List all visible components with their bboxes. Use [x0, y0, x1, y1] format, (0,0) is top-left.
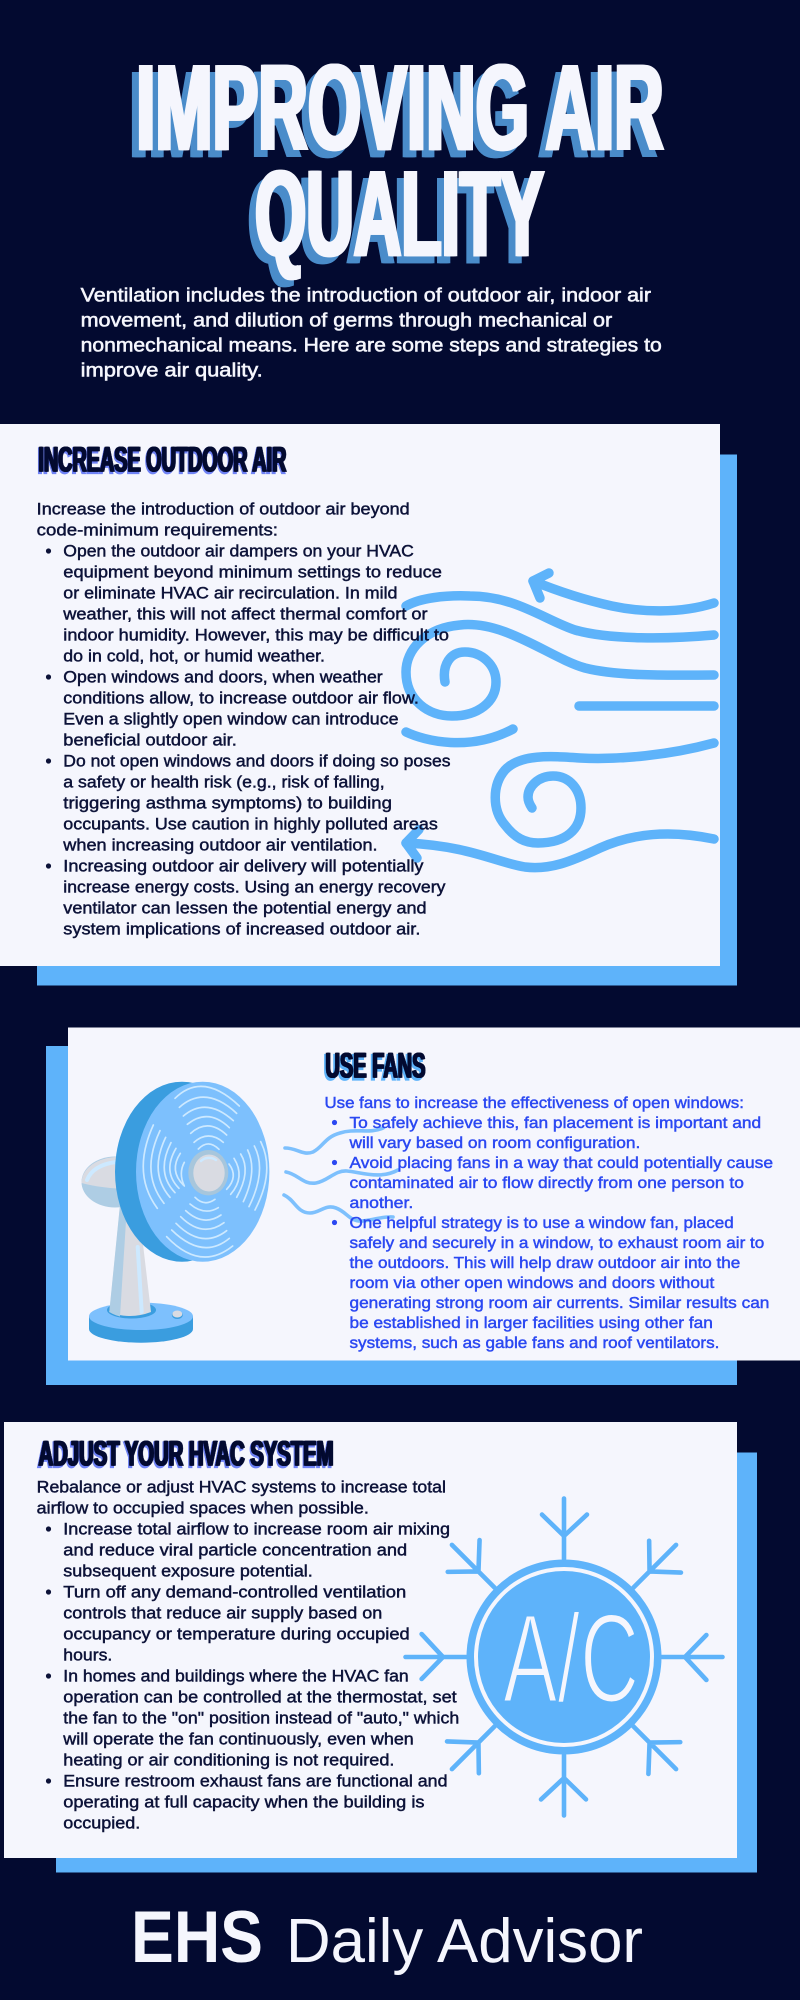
body text: outdoor air steps: do in cold, hot, or humid weather. — [63, 648, 325, 666]
body text: outdoor air steps: Increasing outdoor air delivery will potentially — [63, 858, 424, 876]
body text: fan guidance: safely and securely in a window, to exhaust room air to — [350, 1235, 764, 1252]
body text: outdoor air steps: Open the outdoor air dampers on your HVAC — [63, 542, 414, 560]
body text: fan guidance: Avoid placing fans in a way that could potentially cause — [350, 1155, 773, 1172]
body text: fan guidance: will vary based on room configuration. — [348, 1135, 640, 1152]
heading: increase outdoor air: INCREASE OUTDOOR AIR — [37, 441, 285, 481]
body text: hvac adjustments: controls that reduce air supply based on — [63, 1604, 382, 1622]
body text: outdoor air steps: Open windows and doors, when weather — [63, 668, 383, 686]
body text: fan guidance: contaminated air to flow directly from one person to — [350, 1175, 744, 1192]
panel shadow — [46, 1046, 737, 1385]
body text: hvac adjustments: Turn off any demand-controlled ventilation — [63, 1583, 406, 1601]
intro text: improve air quality. — [81, 361, 263, 382]
body text: fan guidance: the outdoors. This will help draw outdoor air into the — [350, 1255, 740, 1272]
heading: adjust your hvac system — [37, 1434, 334, 1475]
body text: outdoor air steps: Increase the introduction of outdoor air beyond — [37, 500, 410, 518]
body text: fan guidance: To safely achieve this, fan placement is important and — [350, 1115, 761, 1132]
heading: adjust your hvac system: ADJUST YOUR HVAC SYSTEM — [37, 1435, 332, 1475]
intro text — [81, 286, 662, 382]
title: QUALITY — [254, 145, 542, 281]
body text: fan guidance: room via other open windows and doors without — [350, 1275, 715, 1292]
body text: outdoor air steps: system implications of increased outdoor air. — [63, 920, 420, 938]
body text: fan guidance: generating strong room air currents. Similar results can — [350, 1295, 769, 1312]
body text: fan guidance: be established in larger facilities using other fan — [350, 1315, 713, 1332]
heading: adjust your hvac system: ADJUST YOUR HVAC SYSTEM — [39, 1434, 334, 1474]
footer logo: EHS Daily Advisor — [131, 1897, 643, 1978]
body text: hvac adjustments: hours. — [63, 1646, 112, 1664]
body text: outdoor air steps: ventilator can lessen the potential energy and — [63, 900, 427, 918]
heading: use fans: USE FANS — [326, 1046, 426, 1086]
body text: outdoor air steps: increase energy costs. Using an energy recovery — [63, 878, 446, 896]
body text: fan guidance: One helpful strategy is to use a window fan, placed — [350, 1215, 734, 1232]
body text: outdoor air steps: weather, this will not affect thermal comfort or — [62, 606, 428, 624]
body text: outdoor air steps: Even a slightly open window can introduce — [63, 710, 399, 728]
heading: adjust your hvac system: ADJUST YOUR HVAC SYSTEM — [39, 1434, 334, 1474]
body text: hvac adjustments: airflow to occupied spaces when possible. — [37, 1499, 369, 1517]
title — [128, 39, 665, 288]
icon: A/C snowflake — [406, 1498, 722, 1816]
heading: use fans — [324, 1046, 426, 1088]
body text: fan guidance: another. — [350, 1195, 413, 1212]
body text: hvac adjustments: operating at full capacity when the building is — [63, 1793, 425, 1811]
panel: use fans — [46, 1028, 800, 1385]
title: QUALITY — [246, 152, 536, 288]
icon: A/C snowflake: A/C — [503, 1588, 639, 1729]
intro text: Ventilation includes the introduction of outdoor air, indoor air — [81, 286, 652, 307]
heading: increase outdoor air: INCREASE OUTDOOR AIR — [39, 440, 287, 480]
body text: fan guidance: systems, such as gable fans and roof ventilators. — [350, 1335, 719, 1352]
intro text: movement, and dilution of germs through mechanical or — [81, 311, 613, 332]
heading: increase outdoor air — [37, 440, 287, 481]
body text: hvac adjustments: operation can be controlled at the thermostat, set — [63, 1688, 457, 1706]
footer logo: EHS Daily Advisor: Daily Advisor — [286, 1907, 643, 1976]
body text: fan guidance — [324, 1095, 773, 1352]
heading: use fans: USE FANS — [325, 1046, 425, 1086]
body text: hvac adjustments: the fan to the "on" position instead of "auto," which — [63, 1709, 459, 1727]
body text: outdoor air steps: a safety or health risk (e.g., risk of falling, — [63, 774, 385, 792]
panel shadow — [37, 454, 737, 986]
body text: fan guidance: Use fans to increase the effectiveness of open windows: — [324, 1095, 744, 1112]
body text: outdoor air steps: occupants. Use caution in highly polluted areas — [63, 816, 438, 834]
body text: hvac adjustments: In homes and buildings where the HVAC fan — [63, 1667, 409, 1685]
heading: use fans: USE FANS — [324, 1048, 424, 1088]
panel: adjust your hvac system — [4, 1422, 757, 1872]
icon: wind swirls — [406, 573, 714, 868]
icon: desk fan — [82, 1082, 269, 1343]
body text: outdoor air steps: triggering asthma symptoms) to building — [63, 794, 392, 812]
body text: hvac adjustments: Increase total airflow to increase room air mixing — [63, 1520, 450, 1538]
body text: hvac adjustments: occupied. — [63, 1814, 140, 1832]
body text: hvac adjustments: and reduce viral particle concentration and — [63, 1541, 407, 1559]
body text: outdoor air steps: code-minimum requirements: — [37, 522, 278, 540]
heading: use fans: USE FANS — [326, 1046, 426, 1086]
body text: hvac adjustments: occupancy or temperature during occupied — [63, 1625, 410, 1643]
body text: outdoor air steps: or eliminate HVAC air recirculation. In mild — [63, 584, 398, 602]
panel shadow — [56, 1452, 757, 1872]
intro text: nonmechanical means. Here are some steps and strategies to — [81, 336, 662, 357]
panel background — [4, 1422, 737, 1858]
title: QUALITY — [256, 145, 546, 281]
heading: increase outdoor air: INCREASE OUTDOOR AIR — [38, 440, 286, 480]
footer logo: EHS Daily Advisor: EHS — [131, 1897, 263, 1978]
panel: increase outdoor air — [0, 424, 737, 986]
title: QUALITY — [250, 152, 538, 288]
title: QUALITY — [255, 145, 544, 281]
body text: hvac adjustments: will operate the fan continuously, even when — [62, 1730, 414, 1748]
body text: outdoor air steps: when increasing outdoor air ventilation. — [62, 836, 378, 854]
heading: increase outdoor air: INCREASE OUTDOOR AIR — [38, 440, 286, 480]
body text: hvac adjustments: Ensure restroom exhaust fans are functional and — [63, 1772, 448, 1790]
title: QUALITY — [248, 152, 537, 288]
body text: outdoor air steps: indoor humidity. However, this may be difficult to — [63, 626, 449, 644]
body text: hvac adjustments: Rebalance or adjust HVAC systems to increase total — [37, 1478, 446, 1496]
body text: hvac adjustments: subsequent exposure potential. — [63, 1562, 313, 1580]
panel background — [0, 424, 720, 966]
body text: hvac adjustments: heating or air conditioning is not required. — [63, 1751, 394, 1769]
icon: air currents from fan — [284, 1128, 398, 1221]
heading: adjust your hvac system: ADJUST YOUR HVAC SYSTEM — [38, 1434, 333, 1474]
body text: outdoor air steps — [37, 500, 450, 938]
panel background — [68, 1028, 800, 1360]
body text: hvac adjustments — [37, 1478, 459, 1832]
body text: outdoor air steps: beneficial outdoor air. — [63, 732, 237, 750]
body text: outdoor air steps: Do not open windows and doors if doing so poses — [63, 752, 451, 770]
body text: outdoor air steps: equipment beyond minimum settings to reduce — [63, 564, 442, 582]
body text: outdoor air steps: conditions allow, to increase outdoor air flow. — [63, 690, 419, 708]
